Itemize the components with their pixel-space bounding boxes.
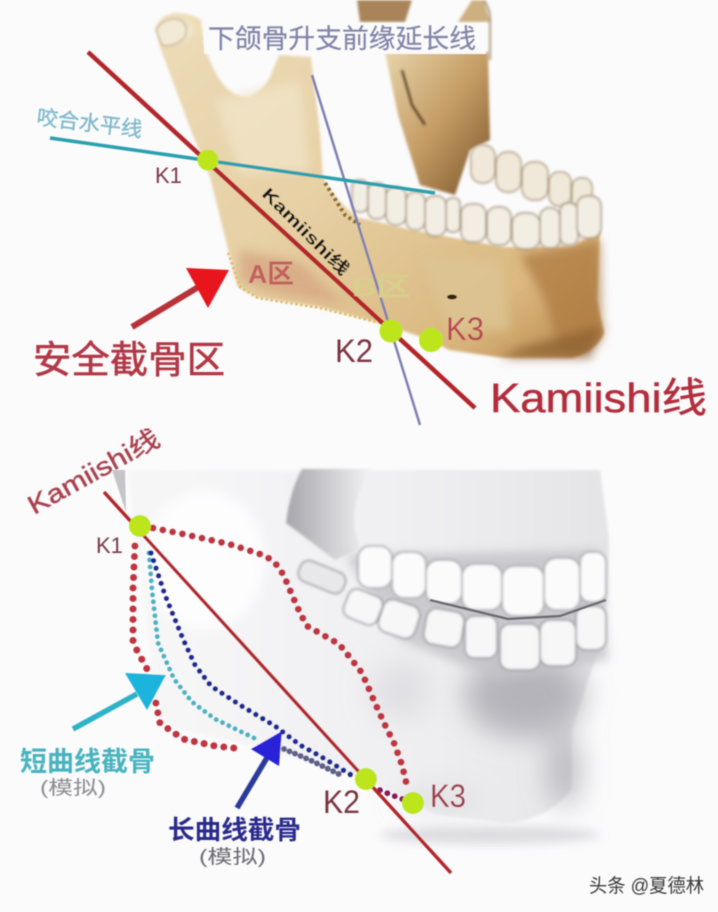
label: long curve osteotomy: 长曲线截骨 [168,815,301,845]
cyan short curve osteotomy [149,553,256,739]
grey-blue overlap dots [284,749,343,776]
label: occlusal horizontal line: 咬合水平线 [35,106,143,142]
illustration: upper teeth [358,546,606,616]
point K2 [355,768,377,790]
illustration: near teeth [352,180,601,249]
label: zone A: A区 [248,259,294,289]
dotted zone boundary A [228,253,380,323]
navy long curve osteotomy [151,553,353,776]
label: short curve osteotomy: 短曲线截骨 [20,747,155,777]
label: Kamiishi line large: Kamiishi线 [490,375,707,421]
panel: lower skull diagram [20,423,704,897]
illustration: maxilla [286,469,372,560]
label: K3: K3 [430,778,466,814]
cyan occlusal horizontal line [50,138,435,193]
dotted zone boundary upper [325,183,360,225]
red contour dots bottom [156,703,243,749]
purple anterior ramus line [312,75,420,425]
panel: upper mandible diagram [33,0,707,425]
mental foramen [447,294,457,300]
label: Kamiishi line rotated: Kamiishi线 [22,423,165,520]
illustration: far teeth [471,145,592,212]
label: K1: K1 [155,163,182,188]
label: Kamiishi on bone: Kamiishi线 [258,184,353,279]
dark red dots between K2 and K3 [380,790,405,800]
arrow: cyan [73,673,166,729]
red Kamiishi line [88,52,475,408]
label: K2: K2 [323,784,360,820]
label: K2: K2 [335,333,373,369]
red contour dots left [133,546,147,669]
illustration: far ramus of mandible [357,0,490,195]
illustration: white ramus highlight [145,490,265,630]
label: K1: K1 [96,533,123,558]
label: simulated, long curve: (模拟) [199,846,266,868]
illustration: condyle [156,19,186,46]
label box: anterior ramus extension line: 下颌骨升支前缘延长线 [208,24,476,54]
point K3 [419,328,443,352]
point K3 [402,792,424,814]
illustration: bite line [430,600,606,619]
label: K3: K3 [446,311,484,347]
arrow: blue [237,731,282,808]
illustration: bone shading [162,20,604,358]
watermark: 头条 @夏德林 [589,875,704,897]
illustration: tooth shadow band [345,550,608,680]
point K2 [380,320,402,342]
illustration: near mandible bone [156,13,604,358]
label: zone B: B区 [352,272,410,302]
illustration: skull background [112,470,609,844]
point K1 [129,515,151,537]
red Kamiishi line [104,492,451,873]
red mandibular contour dots upper [153,528,407,786]
point K1 [198,150,218,170]
label: safe osteotomy zone: 安全截骨区 [33,340,225,382]
arrow: red pointing to safe zone [132,268,229,327]
illustration: chin shading [370,653,585,810]
illustration: lower teeth [296,558,606,670]
label: simulated, short curve: (模拟) [40,777,106,799]
